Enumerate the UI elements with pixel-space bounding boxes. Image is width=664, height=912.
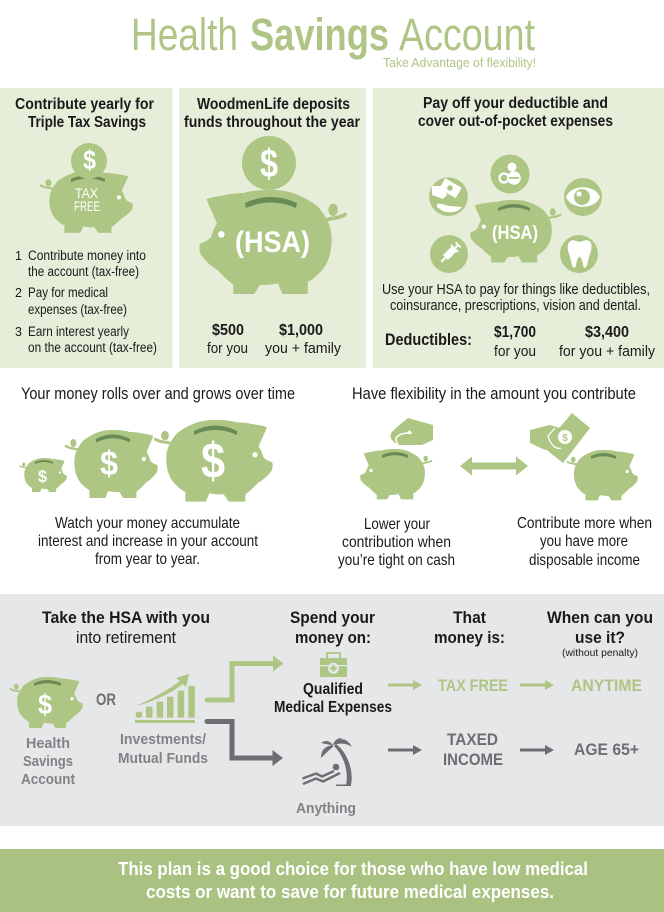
amount: for you: $500 (212, 322, 244, 339)
title: Health (131, 9, 238, 60)
heading: Your money rolls over and grows over time (21, 384, 295, 403)
icon: medical kit (320, 653, 347, 677)
banner (0, 849, 664, 912)
panel heading (184, 96, 360, 131)
caption: contribute more: disposable income (529, 552, 640, 569)
description (38, 515, 258, 568)
caption: contribute more: you have more (540, 533, 628, 550)
panel heading: Triple Tax Savings (28, 114, 146, 131)
panel heading: Pay off your deductible and (423, 95, 608, 112)
banner: costs or want to save for future medical expenses. (146, 882, 554, 902)
numbered list: 1 (15, 249, 22, 263)
label: investments: Investments/ (120, 731, 207, 748)
amount: you + family: $1,000 (279, 322, 323, 339)
deductible: for you (494, 324, 536, 360)
icon: HSA piggy bank with coin: (HSA) (235, 226, 310, 259)
label: taxed income: INCOME (443, 750, 503, 769)
icon: money in hand (429, 177, 468, 216)
icon: tax free piggy bank: TAX (75, 185, 99, 201)
arrow: grey route (207, 722, 283, 766)
description: Watch your money accumulate (55, 515, 240, 532)
or: OR (96, 691, 116, 709)
deductible: for you + family (559, 324, 655, 360)
icon: HSA piggy bank: (HSA) (492, 223, 538, 244)
heading: that money is: money is: (434, 629, 505, 647)
caption: lower contribution (338, 516, 455, 569)
numbered list: 2 (15, 286, 22, 300)
label: age 65+: AGE 65+ (574, 740, 639, 759)
icon: growing piggy banks: $ (38, 467, 48, 486)
heading: take the HSA: Take the HSA with you (42, 609, 210, 627)
arrow: green route (207, 656, 284, 700)
icon: piggy bank with hand (360, 418, 433, 499)
section: rolls over (20, 384, 295, 568)
panel: retirement (0, 594, 664, 826)
title: Savings (250, 9, 389, 60)
deductible: for you: $1,700 (494, 324, 536, 341)
label: health savings account: Account (21, 771, 75, 788)
arrow: to tax free (388, 680, 422, 690)
panel heading: Contribute yearly for (15, 96, 154, 113)
icon: HSA piggy (10, 677, 83, 728)
description: interest and increase in your account (38, 533, 258, 550)
heading: that money is (434, 609, 505, 647)
caption: lower contribution: Lower your (364, 516, 431, 533)
arrow: to taxed income (388, 745, 422, 755)
icon: tax free piggy bank: $ (83, 145, 96, 175)
title (131, 9, 535, 60)
label: tax free: TAX FREE (438, 676, 508, 695)
panel: triple tax savings (0, 88, 172, 368)
description (382, 281, 650, 314)
heading: when: When can you (547, 609, 653, 627)
icon: tax free piggy bank: FREE (74, 198, 100, 214)
icon: HSA piggy bank with coin: $ (260, 142, 278, 186)
numbered list: on the account (tax-free) (28, 340, 157, 355)
numbered list: Contribute money into (28, 248, 146, 263)
panel: WoodmenLife deposits (179, 88, 366, 368)
icon: eye (564, 178, 602, 216)
icon: growing piggy banks: $ (201, 433, 225, 489)
caption: lower contribution: you’re tight on cash (338, 552, 455, 569)
numbered list: Earn interest yearly (28, 324, 129, 339)
icon: growing piggy banks (20, 420, 273, 502)
label: taxed income (443, 730, 503, 769)
icon: tax free piggy bank (41, 143, 133, 233)
icon: syringe (430, 235, 468, 273)
deductible: for you + family: for you + family (559, 343, 655, 360)
label: health savings account (21, 735, 75, 788)
numbered list: 3 (15, 325, 22, 339)
icon: pills (490, 154, 530, 194)
heading: spend: Spend your (290, 609, 376, 627)
icon: HSA piggy bank with coin (199, 136, 345, 294)
icon: piggy bank with hand and money (530, 413, 638, 500)
heading: when (547, 609, 653, 659)
amount: for you: for you (207, 340, 248, 357)
heading: when: (without penalty) (562, 647, 638, 659)
caption: contribute more (517, 515, 652, 569)
panel: deductible (373, 88, 664, 368)
panel heading: WoodmenLife deposits (197, 96, 350, 113)
arrow: double (460, 456, 528, 476)
panel heading (15, 96, 154, 131)
caption: lower contribution: contribution when (342, 534, 451, 551)
label: qualified medical expenses: Qualified (303, 681, 363, 698)
heading: take the HSA: into retirement (76, 629, 176, 647)
icon: palm and lounger (302, 738, 352, 786)
deductible: for you: for you (494, 343, 536, 360)
numbered list: expenses (tax-free) (28, 302, 127, 317)
heading: spend: money on: (295, 629, 371, 647)
arrow: to anytime (520, 680, 554, 690)
icon: HSA piggy: $ (38, 689, 52, 720)
label: investments (118, 731, 208, 767)
icon: HSA piggy bank (470, 200, 560, 263)
heading: spend (290, 609, 376, 647)
label: anything: Anything (296, 800, 356, 817)
panel heading (418, 95, 613, 130)
amount: you + family (265, 322, 341, 357)
numbered list: the account (tax-free) (28, 264, 139, 279)
chart: growth bars (135, 674, 195, 723)
amount: for you (207, 322, 248, 357)
label: qualified medical expenses: Medical Expenses (274, 699, 392, 716)
heading: take the HSA (42, 609, 210, 647)
description: from year to year. (95, 551, 200, 568)
arrow: to age 65 (520, 745, 554, 755)
numbered list: Pay for medical (28, 285, 108, 300)
amount: you + family: you + family (265, 340, 341, 357)
label: taxed income: TAXED (447, 730, 498, 749)
section: flexibility (338, 384, 652, 569)
deductible: for you + family: $3,400 (585, 324, 629, 341)
icon: tooth (560, 235, 598, 273)
heading: when: use it? (575, 629, 625, 647)
icon: piggy bank with hand and money: $ (562, 433, 568, 444)
deductibles label: Deductibles: (385, 331, 472, 349)
panel heading: cover out-of-pocket expenses (418, 113, 613, 130)
label: qualified medical expenses (274, 681, 392, 716)
label: health savings account: Savings (23, 753, 73, 770)
title: Account (399, 9, 535, 60)
icon: growing piggy banks: $ (100, 445, 118, 483)
label: investments: Mutual Funds (118, 750, 208, 767)
label: anytime: ANYTIME (571, 676, 642, 695)
banner: This plan is a good choice for those who have low medical (118, 859, 588, 879)
heading: that money is: That (453, 609, 486, 627)
panel heading: funds throughout the year (184, 114, 360, 131)
label: health savings account: Health (26, 735, 70, 752)
subtitle: Take Advantage of flexibility! (383, 56, 536, 70)
numbered list (15, 248, 157, 355)
